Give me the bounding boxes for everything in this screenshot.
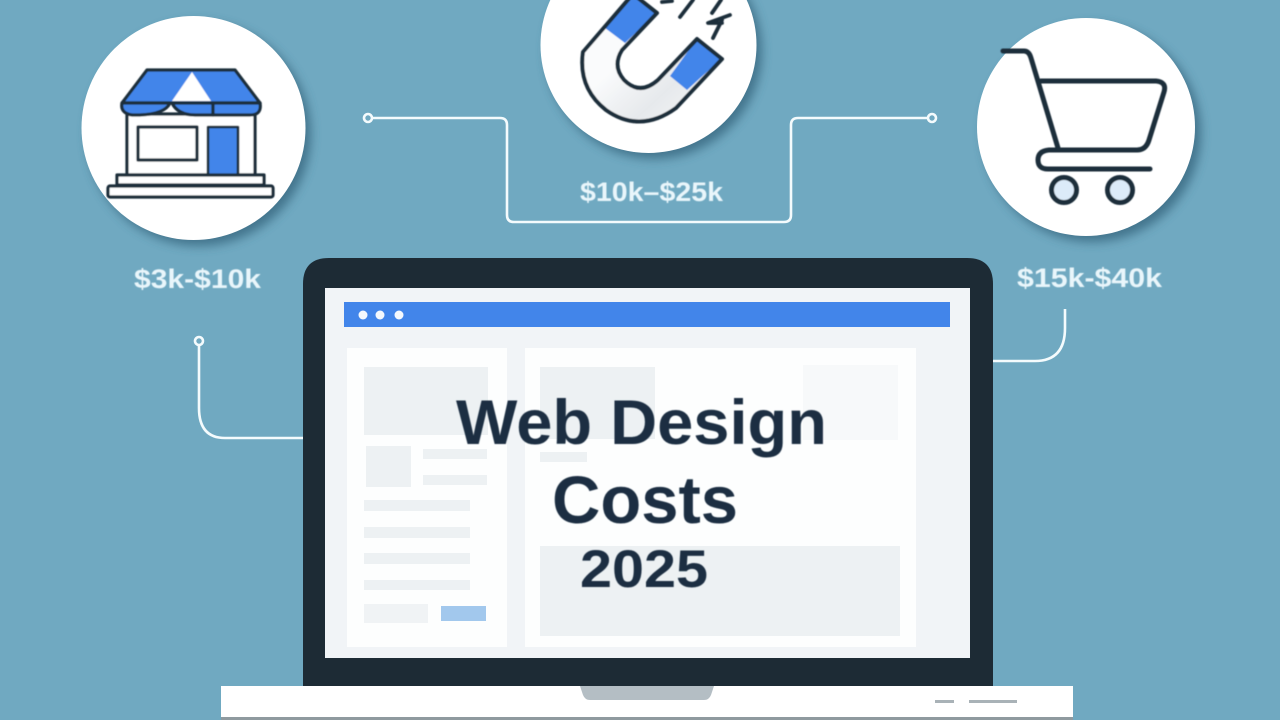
label: lead-generation price: $10k–$25k: [580, 177, 724, 207]
laptop screen: [325, 288, 970, 658]
laptop bezel: [303, 258, 993, 690]
connector: left circle to laptop: [195, 337, 303, 438]
label: e-commerce price: $15k-$40k: [1017, 263, 1163, 293]
label: storefront price: $3k-$10k: [134, 264, 262, 294]
web page sidebar mockup: [347, 348, 507, 647]
browser toolbar: [344, 302, 950, 327]
title: [456, 388, 827, 599]
title: Costs: [552, 463, 738, 538]
icon: storefront: [108, 70, 273, 197]
icon: magnet: [582, 0, 730, 122]
icon: shopping cart: [1003, 51, 1165, 202]
connector: right circle to laptop: [993, 309, 1065, 361]
laptop base: [221, 686, 1073, 720]
panel: e-commerce tier: [977, 18, 1201, 242]
connector: top looped line: [364, 114, 936, 222]
laptop: [221, 258, 1073, 720]
title: Web Design: [456, 388, 827, 458]
panel: storefront tier: [82, 16, 311, 246]
panel: lead-generation tier: [540, 0, 762, 159]
title: 2025: [580, 540, 708, 599]
web page main mockup: [525, 348, 916, 647]
